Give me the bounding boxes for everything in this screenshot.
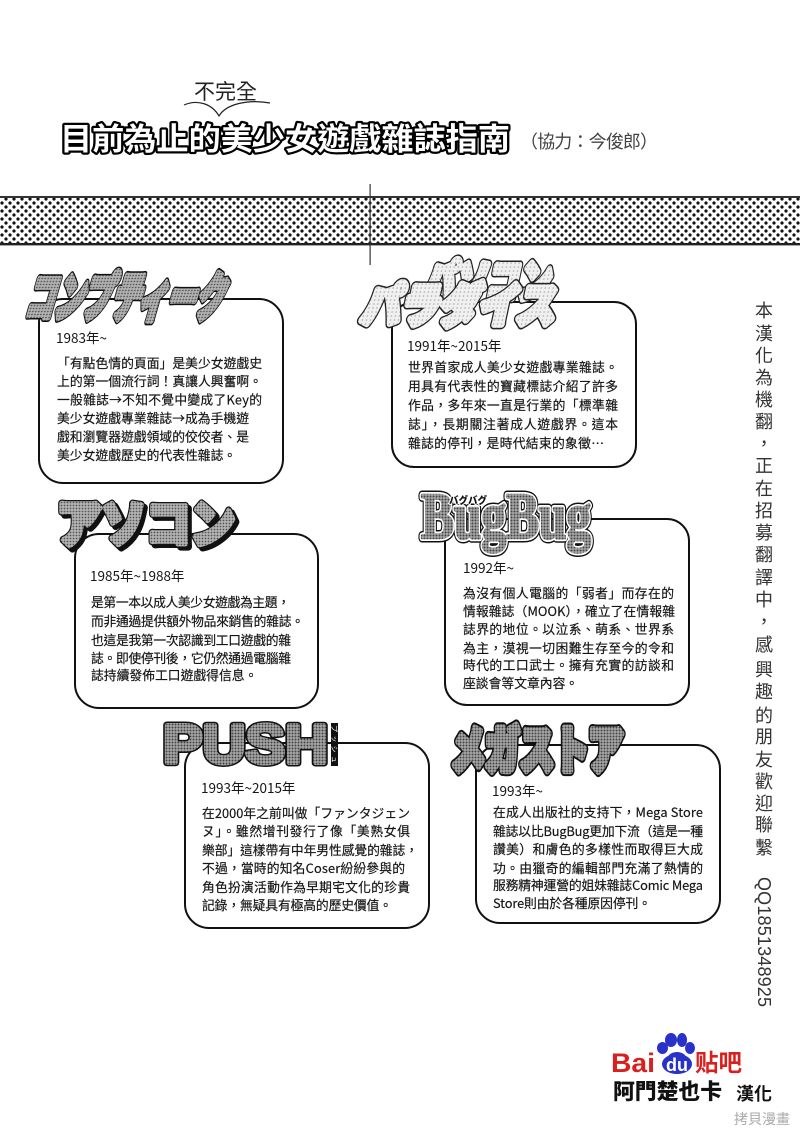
description: 是第一本以成人美少女遊戲為主題， [91, 592, 290, 611]
logo: アソコン [57, 485, 235, 557]
Bai wordmark: Bai [611, 1048, 655, 1078]
logo: バグバグ [449, 492, 487, 507]
side note: translator recruitment: 招 [755, 497, 773, 523]
logo [357, 246, 565, 336]
description [463, 583, 675, 692]
credit: translation group: 阿門楚也卡 [613, 1075, 722, 1106]
side note: translator recruitment: 漢 [755, 320, 773, 346]
side note: translator recruitment: 譯 [755, 564, 773, 590]
box [476, 745, 720, 923]
logo: BugBug [421, 480, 591, 553]
year: 1985年~1988年 [90, 565, 184, 585]
description: 誌」，長期關注著成人遊戲界。這本 [408, 414, 618, 433]
box [445, 519, 689, 705]
description: 讚美）和膚色的多樣性而取得巨大成 [493, 839, 703, 858]
description: 誌。即使停刊後，它仍然通過電腦雜 [91, 648, 291, 667]
description: 雜誌以比BugBug更加下流（這是一種 [493, 821, 703, 840]
description: 在成人出版社的支持下，Mega Store [493, 802, 703, 821]
description: 為沒有個人電腦的「弱者」而存在的 [463, 583, 674, 602]
du wordmark: du [666, 1055, 688, 1075]
logo: BugBug [421, 480, 591, 553]
description: 上的第一個流行詞！真讓人興奮啊。 [57, 371, 262, 390]
description: 為主，漠視一切困難生存至今的令和 [463, 638, 674, 657]
logo [20, 256, 239, 332]
description: 作品，多年來一直是行業的「標準雜 [408, 395, 618, 414]
side note: translator recruitment: 感 [755, 631, 773, 657]
side note: translator recruitment: 的 [755, 702, 773, 728]
description: 誌界的地位。以泣系、萌系、世界系 [463, 619, 674, 638]
side note: translator recruitment: 友 [755, 746, 773, 772]
side note: translator recruitment: 繫 [755, 834, 773, 860]
description: 時代的工口武士。擁有充實的訪談和 [463, 655, 674, 674]
side note: translator recruitment: 為 [755, 364, 773, 390]
side note: translator recruitment: 本 [755, 297, 773, 323]
logo: パソコン [419, 246, 559, 310]
logo: メガストア [451, 711, 623, 783]
side note: translator recruitment: 歡 [755, 768, 773, 794]
side note: translator recruitment: 趣 [755, 678, 773, 704]
description: 情報雜誌（MOOK），確立了在情報雜 [463, 601, 675, 620]
description: 在2000年之前叫做「ファンタジェン [202, 803, 410, 822]
side note: translator recruitment: 興 [755, 656, 773, 682]
description [493, 802, 703, 912]
description: 誌持續發佈工口遊戲得信息。 [91, 665, 257, 684]
year: 1991年~2015年 [407, 335, 501, 355]
logo: アソコン [60, 488, 238, 560]
side note: translator recruitment: 在 [755, 475, 773, 501]
panel: PUSH [163, 713, 429, 928]
credit: （協力：今俊郎） [520, 128, 658, 154]
description [202, 803, 418, 914]
side note: translator recruitment: 朋 [755, 723, 773, 749]
year: 1993年~ [492, 780, 543, 800]
description [57, 353, 262, 464]
logo: PUSH [163, 713, 328, 775]
description: 戲和瀏覽器遊戲領域的佼佼者、是 [57, 426, 249, 446]
side note: translator recruitment: 化 [755, 342, 773, 368]
description: 「有點色情的頁面」是美少女遊戲史 [57, 353, 262, 372]
side note: translator recruitment: ， [755, 608, 773, 634]
box [185, 743, 429, 928]
logo: コンプティーク [20, 256, 239, 332]
credit: translation group: 漢化 [736, 1081, 772, 1106]
logo: BugBug [421, 480, 591, 553]
side note: translator recruitment: 正 [755, 452, 773, 478]
panel: Mega Store [451, 711, 720, 923]
side note: translator recruitment: 中 [755, 586, 773, 612]
annotation: 不完全 with brace [184, 76, 270, 116]
description: 美少女遊戲歷史的代表性雜誌。 [57, 445, 236, 464]
side note: translator recruitment: 機 [755, 386, 773, 412]
halftone band [0, 184, 800, 265]
description: 角色扮演活動作為早期宅文化的珍貴 [202, 877, 410, 896]
logo: プッシュ [329, 725, 339, 763]
logo: PUSH [163, 713, 328, 775]
description: 記錄，無疑具有極高的歷史價值。 [202, 895, 392, 914]
logo: パソコン [419, 246, 559, 310]
year: 1983年~ [56, 327, 107, 347]
panel: BugBug [421, 480, 689, 705]
description [408, 357, 618, 452]
logo: メガストア [451, 711, 623, 783]
panel: Comptiq [20, 256, 283, 483]
box [39, 299, 283, 483]
description: 世界首家成人美少女遊戲專業雜誌。 [408, 357, 618, 376]
description: 不過，當時的知名Coser紛紛參與的 [202, 858, 405, 877]
description: 服務精神運營的姐妹雜誌Comic Mega [493, 875, 703, 894]
side note: translator recruitment: 募 [755, 519, 773, 545]
description: 樂部」這樣帶有中年男性感覺的雜誌， [202, 840, 418, 859]
side note: translator recruitment: 聯 [755, 811, 773, 837]
description: 功。由獵奇的編輯部門充滿了熱情的 [493, 858, 703, 877]
logo: コンプティーク [20, 256, 239, 332]
logo [451, 711, 623, 783]
description: 用具有代表性的寶藏標誌介紹了許多 [408, 376, 618, 395]
description [91, 592, 304, 684]
description: Store則由於各種原因停刊。 [493, 893, 651, 912]
logo: アソコン [57, 485, 235, 557]
watermark: 拷貝漫畫 [734, 1109, 790, 1129]
box [75, 534, 318, 708]
description: 而非通過提供額外物品來銷售的雜誌。 [91, 611, 304, 630]
logo: パラダイス [357, 270, 565, 336]
side note: translator recruitment: QQ1851348925 [754, 877, 774, 1007]
panel: Asokon [57, 485, 318, 708]
logo: Baidu Tieba [611, 1033, 742, 1078]
description: 雜誌的停刊，是時代結束的象徵… [408, 433, 604, 452]
side note: translator recruitment: 翻 [755, 541, 773, 567]
side note: translator recruitment: 翻 [755, 408, 773, 434]
description: 一般雜誌→不知不覺中變成了Key的 [57, 390, 262, 408]
贴吧 wordmark: 贴吧 [695, 1043, 742, 1078]
panel: Pasokon Paradise [357, 246, 636, 467]
credit: translation group [613, 1075, 772, 1106]
side note: translator recruitment: 迎 [755, 790, 773, 816]
description: ヌ」。雖然增刊發行了像「美熟女俱 [202, 821, 410, 840]
box [392, 302, 636, 467]
year: 1993年~2015年 [201, 777, 295, 797]
year: 1992年~ [463, 557, 514, 577]
description: 美少女遊戲專業雜誌→成為手機遊 [57, 408, 249, 427]
side note: translator recruitment: ， [755, 430, 773, 456]
title: 目前為止的美少女遊戲雜誌指南 [60, 114, 510, 159]
logo: パラダイス [357, 270, 565, 336]
icon: paw [657, 1033, 695, 1074]
annotation: 不完全 with brace: 不完全 [194, 76, 257, 106]
description: 也這是我第一次認識到工口遊戲的雜 [91, 630, 291, 649]
side note: translator recruitment [754, 297, 774, 1007]
description: 座談會等文章內容。 [463, 673, 578, 692]
